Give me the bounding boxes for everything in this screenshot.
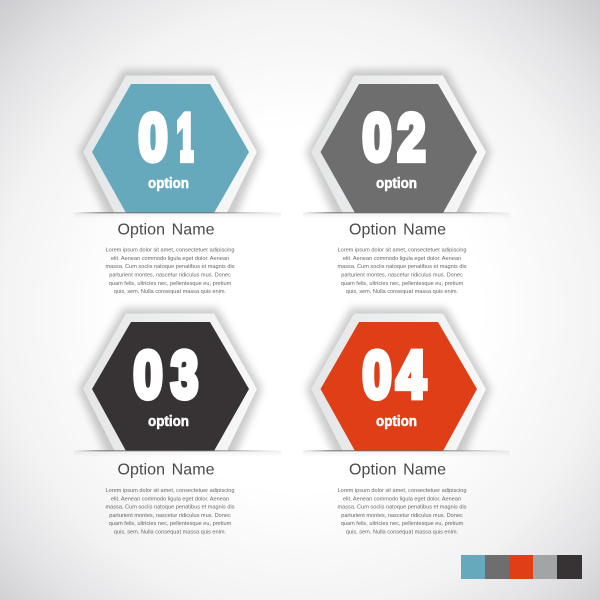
description: massa. Cum sociis natoque penatibus et magnis dis	[105, 264, 235, 270]
number 02: 2	[398, 101, 425, 175]
divider line	[74, 212, 281, 219]
hexagon 03	[78, 308, 262, 463]
number 03: 3	[171, 339, 198, 412]
description: elit. Aenean commodo ligula eget dolor. Aenean	[343, 497, 461, 503]
description	[105, 488, 235, 536]
number 02: 0	[363, 100, 391, 174]
description: Lorem ipsum dolor sit amet, consectetuer adipiscing	[105, 488, 235, 494]
number 01	[139, 100, 200, 175]
description: elit. Aenean commodo ligula eget dolor. Aenean	[111, 256, 229, 262]
number 01: 1	[176, 101, 196, 175]
label option: option	[148, 176, 189, 192]
panel: option 01	[74, 70, 281, 295]
divider line	[303, 212, 510, 219]
description	[337, 248, 467, 295]
option name: Option Name	[349, 222, 446, 238]
number 03: 0	[134, 337, 162, 412]
option name: Option Name	[118, 462, 215, 478]
hexagon 02	[306, 70, 491, 225]
description: massa. Cum sociis natoque penatibus et magnis dis	[105, 505, 235, 511]
description: quis, sem. Nulla consequat massa quis enim.	[114, 530, 227, 536]
label option: option	[376, 414, 417, 430]
number 04	[363, 337, 426, 412]
description: parturient montes, nascetur ridiculus mus. Donec	[109, 272, 231, 278]
panel: option 03	[74, 308, 281, 536]
panel: option 04	[303, 308, 510, 536]
divider line	[74, 450, 281, 457]
description: parturient montes, nascetur ridiculus mus. Donec	[341, 513, 463, 519]
description: massa. Cum sociis natoque penatibus et magnis dis	[337, 264, 467, 270]
panel: option 02	[303, 70, 510, 295]
description: elit. Aenean commodo ligula eget dolor. Aenean	[343, 256, 461, 262]
divider line	[303, 450, 510, 457]
hexagon 04	[306, 308, 491, 463]
description	[105, 248, 235, 295]
description: parturient montes, nascetur ridiculus mus. Donec	[341, 272, 463, 278]
description: elit. Aenean commodo ligula eget dolor. Aenean	[111, 497, 229, 503]
hexagon 01	[78, 70, 262, 225]
number 04: 0	[363, 337, 391, 412]
description: quam felis, ultricies nec, pellentesque eu, pretium	[341, 521, 464, 527]
description: massa. Cum sociis natoque penatibus et magnis dis	[337, 505, 467, 511]
description: Lorem ipsum dolor sit amet, consectetuer adipiscing	[105, 248, 235, 254]
number 04: 4	[396, 338, 426, 412]
label option: option	[376, 176, 417, 192]
colour palette swatches	[461, 555, 582, 579]
description	[337, 488, 467, 536]
description: quis, sem. Nulla consequat massa quis enim.	[346, 289, 459, 295]
description: quam felis, ultricies nec, pellentesque eu, pretium	[109, 281, 232, 287]
description: quis, sem. Nulla consequat massa quis enim.	[346, 530, 459, 536]
number 03	[134, 337, 198, 412]
description: quam felis, ultricies nec, pellentesque eu, pretium	[341, 281, 464, 287]
description: quis, sem. Nulla consequat massa quis enim.	[114, 289, 227, 295]
description: quam felis, ultricies nec, pellentesque eu, pretium	[109, 521, 232, 527]
description: Lorem ipsum dolor sit amet, consectetuer adipiscing	[337, 488, 467, 494]
option name: Option Name	[349, 462, 446, 478]
number 02	[363, 100, 425, 175]
description: parturient montes, nascetur ridiculus mus. Donec	[109, 513, 231, 519]
description: Lorem ipsum dolor sit amet, consectetuer adipiscing	[337, 248, 467, 254]
number 01: 0	[139, 100, 167, 174]
label option: option	[148, 414, 189, 430]
option name: Option Name	[118, 222, 215, 238]
